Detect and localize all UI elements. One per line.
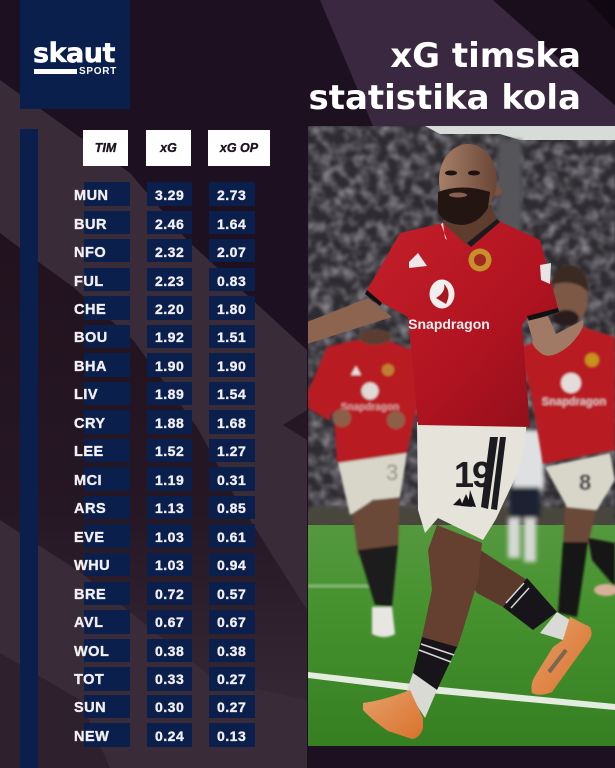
table rows: 2.23 — [155, 273, 184, 289]
table rows: 2.07 — [217, 244, 246, 260]
table rows: TOT — [74, 672, 104, 688]
table rows: CHE — [74, 302, 106, 318]
background player number 8: 8 — [579, 470, 591, 495]
main player: front leg — [422, 525, 482, 648]
table rows: 1.52 — [155, 443, 184, 459]
background player number 3: 3 — [386, 460, 398, 485]
table headers: xG OP — [219, 141, 259, 155]
table rows: NEW — [74, 729, 109, 745]
table rows: 0.33 — [155, 671, 184, 687]
table rows: 0.94 — [217, 557, 246, 573]
table rows: AVL — [74, 615, 103, 631]
table rows: MUN — [74, 188, 109, 204]
table rows: 1.90 — [155, 358, 184, 374]
background player: opponent — [508, 430, 544, 562]
background player number 8: Snapdragon — [542, 396, 606, 408]
table rows: 0.67 — [155, 614, 184, 630]
main player: front boot — [363, 673, 437, 739]
table rows: 2.73 — [217, 187, 246, 203]
table rows: 0.72 — [155, 586, 184, 602]
table rows: 0.27 — [217, 671, 246, 687]
table rows: LIV — [74, 387, 98, 403]
crowd background — [308, 126, 615, 527]
table rows: 1.27 — [217, 443, 246, 459]
table rows: 0.31 — [217, 472, 246, 488]
table rows: 1.92 — [155, 329, 184, 345]
table rows: BOU — [74, 330, 108, 346]
table rows: 1.54 — [217, 386, 246, 402]
table rows: ARS — [74, 501, 106, 517]
table headers: xG — [159, 141, 177, 155]
table rows: 1.64 — [217, 216, 246, 232]
logo block — [20, 0, 130, 109]
table rows: WOL — [74, 644, 109, 660]
table rows: BUR — [74, 217, 107, 233]
main player: shorts — [417, 420, 527, 540]
table rows: 1.03 — [155, 557, 184, 573]
table rows: EVE — [74, 530, 105, 546]
main player: forearm and hand — [527, 316, 583, 356]
left vertical bar — [20, 129, 38, 768]
table rows: 0.38 — [155, 643, 184, 659]
table rows: NFO — [74, 245, 106, 261]
table rows: 0.13 — [217, 728, 246, 744]
title — [308, 36, 581, 118]
photo: football player celebrating — [307, 126, 615, 746]
table rows: 1.89 — [155, 386, 184, 402]
table rows: 1.51 — [217, 329, 246, 345]
title: statistika kola — [308, 78, 581, 118]
main player: jersey: Snapdragon — [408, 316, 490, 332]
main player: jersey — [365, 219, 559, 427]
table rows: 2.46 — [155, 216, 184, 232]
table rows: 1.68 — [217, 415, 246, 431]
main player: head — [438, 144, 502, 225]
table rows: 0.61 — [217, 529, 246, 545]
main player: back sock — [503, 578, 557, 630]
background player number 3: Snapdragon — [341, 402, 399, 413]
table rows: 2.32 — [155, 244, 184, 260]
pitch — [308, 525, 615, 746]
main player: neck — [444, 205, 497, 246]
table rows: 3.29 — [155, 187, 184, 203]
main player: shorts: 19 — [454, 454, 491, 495]
main player: back boot — [531, 612, 592, 695]
table rows: BRE — [74, 587, 106, 603]
table rows: 0.38 — [217, 643, 246, 659]
table rows: BHA — [74, 359, 107, 375]
background player number 3 — [308, 329, 420, 637]
table rows: FUL — [74, 274, 104, 290]
table headers — [83, 130, 270, 166]
title: xG timska — [390, 36, 581, 76]
table rows: 1.80 — [217, 301, 246, 317]
table rows: 0.83 — [217, 273, 246, 289]
table rows — [74, 182, 255, 747]
table rows: CRY — [74, 416, 106, 432]
logo block: skaut — [33, 38, 115, 69]
background player number 8 — [520, 265, 615, 617]
main player: back leg — [475, 550, 526, 607]
main player: left arm — [307, 298, 392, 344]
logo block: SPORT — [79, 66, 117, 77]
table rows: 0.30 — [155, 699, 184, 715]
table rows: LEE — [74, 444, 104, 460]
table rows: 1.03 — [155, 529, 184, 545]
table rows: 2.20 — [155, 301, 184, 317]
table rows: 0.67 — [217, 614, 246, 630]
table rows: WHU — [74, 558, 110, 574]
table rows: 1.90 — [217, 358, 246, 374]
table rows: 1.19 — [155, 472, 184, 488]
table rows: 0.85 — [217, 500, 246, 516]
table headers: TIM — [95, 141, 117, 155]
table rows: MCI — [74, 473, 102, 489]
table rows: SUN — [74, 700, 106, 716]
main player: front sock — [413, 637, 457, 690]
table rows: 0.27 — [217, 699, 246, 715]
table rows: 1.13 — [155, 500, 184, 516]
table rows: 0.57 — [217, 586, 246, 602]
table rows: 0.24 — [155, 728, 184, 744]
table rows: 1.88 — [155, 415, 184, 431]
